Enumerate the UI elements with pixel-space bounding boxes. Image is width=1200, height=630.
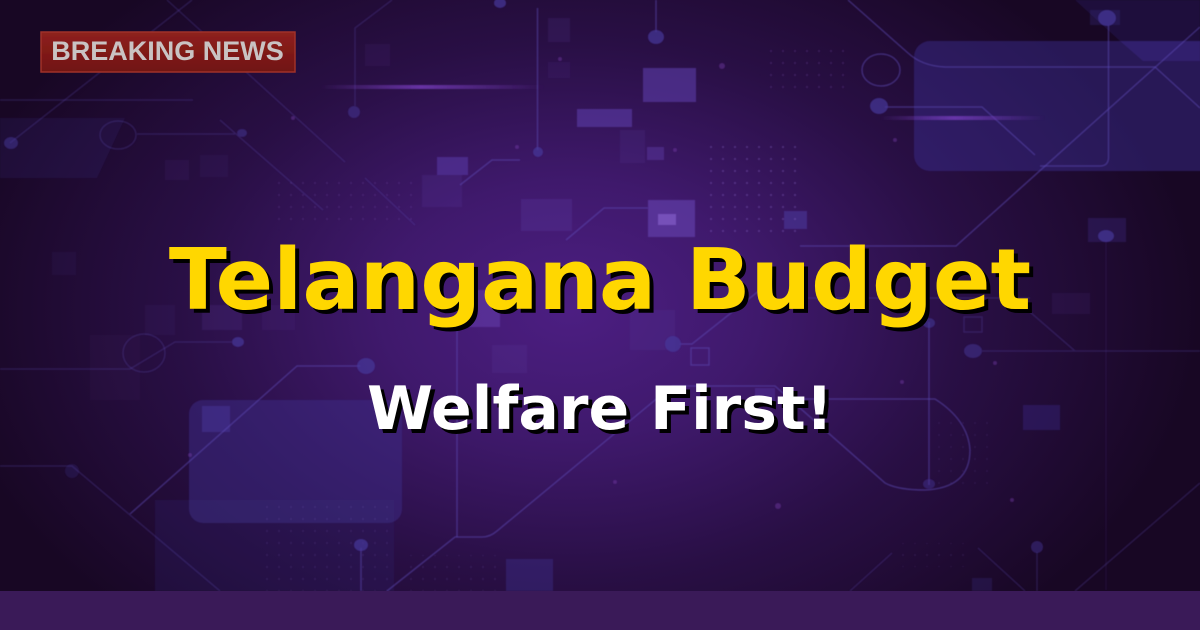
sparkle dots [188, 57, 1014, 509]
title: Telangana Budget [169, 231, 1031, 330]
breaking news badge [41, 32, 295, 72]
glow streaks [320, 85, 1045, 120]
subtitle: Welfare First! [367, 374, 833, 444]
breaking news badge: BREAKING NEWS [51, 36, 284, 66]
dot grids [260, 50, 990, 591]
bottom band [0, 591, 1200, 630]
